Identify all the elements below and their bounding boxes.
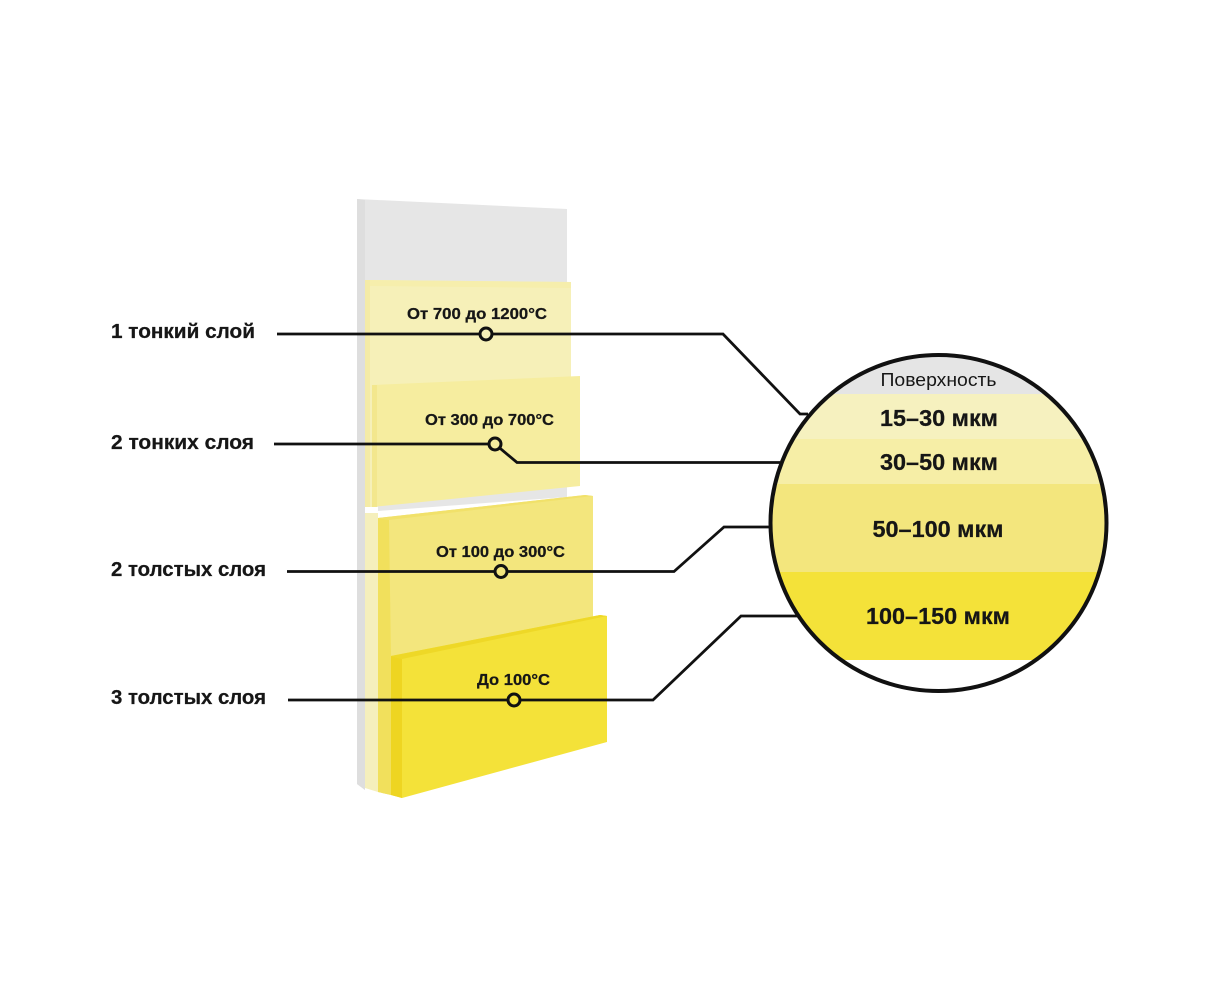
circle outline: [770, 355, 1106, 691]
label: 100–150 μm: 100–150 мкм: [866, 603, 1010, 629]
left label 3: 2 толстых слоя: [111, 559, 266, 581]
layer 3: [378, 495, 593, 795]
leader line 4: [288, 616, 800, 706]
label: surface: Поверхность: [880, 370, 996, 390]
leader line 3: [287, 527, 770, 578]
layer 2: [372, 376, 580, 507]
cross-section bands: [772, 357, 1104, 660]
layer 4: [391, 615, 607, 798]
layered wall diagram: [357, 199, 607, 798]
label: 30–50 μm: 30–50 мкм: [880, 449, 998, 475]
left label 4: 3 толстых слоя: [111, 687, 266, 709]
wall base: [357, 199, 567, 790]
label: 15–30 μm: 15–30 мкм: [880, 405, 998, 431]
temperature label 2: От 300 до 700°С: [425, 412, 554, 429]
layer 1: [365, 280, 571, 792]
left label 1: 1 тонкий слой: [111, 321, 255, 343]
temperature label 1: От 700 до 1200°С: [407, 306, 547, 323]
label: 50–100 μm: 50–100 мкм: [872, 516, 1004, 542]
magnified section circle: [770, 355, 1110, 695]
temperature label 4: До 100°С: [477, 672, 550, 689]
temperature label 3: От 100 до 300°С: [436, 544, 565, 561]
left label 2: 2 тонких слоя: [111, 432, 254, 454]
leader line 2: [274, 438, 780, 462]
leader line 1: [277, 328, 808, 414]
